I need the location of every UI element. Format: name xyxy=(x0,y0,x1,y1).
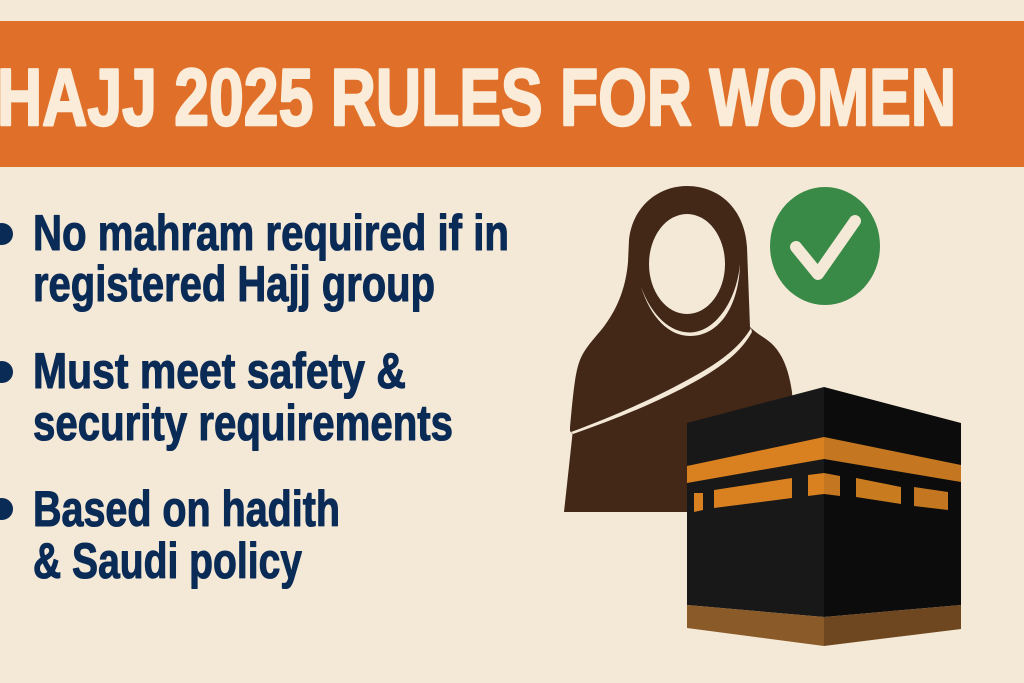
icon: woman in hijab xyxy=(564,186,800,512)
bullet 1: no mahram: registered Hajj group xyxy=(33,256,435,312)
bullet 3: hadith and Saudi policy: & Saudi policy xyxy=(33,533,302,589)
base xyxy=(687,605,961,646)
face opening xyxy=(649,214,725,314)
icon: Kaaba xyxy=(687,387,961,646)
bullet list xyxy=(0,205,509,589)
title banner xyxy=(0,21,1024,167)
bullet 1: no mahram xyxy=(0,205,509,312)
bullet 2: safety and security xyxy=(0,343,453,451)
right face xyxy=(824,387,961,617)
scarf fold xyxy=(641,264,740,336)
icon: green check mark xyxy=(770,187,880,305)
left face xyxy=(687,387,824,617)
bullet 2: safety and security: security requirements xyxy=(33,395,453,451)
bullet 3: hadith and Saudi policy xyxy=(0,481,340,589)
gold panels xyxy=(694,473,948,512)
bullet 1: no mahram: No mahram required if in xyxy=(33,205,509,261)
gold band xyxy=(687,437,961,483)
bullet 2: safety and security: Must meet safety & xyxy=(33,343,406,399)
bullet 3: hadith and Saudi policy: Based on hadith xyxy=(33,481,340,537)
scarf diagonal xyxy=(571,328,752,434)
